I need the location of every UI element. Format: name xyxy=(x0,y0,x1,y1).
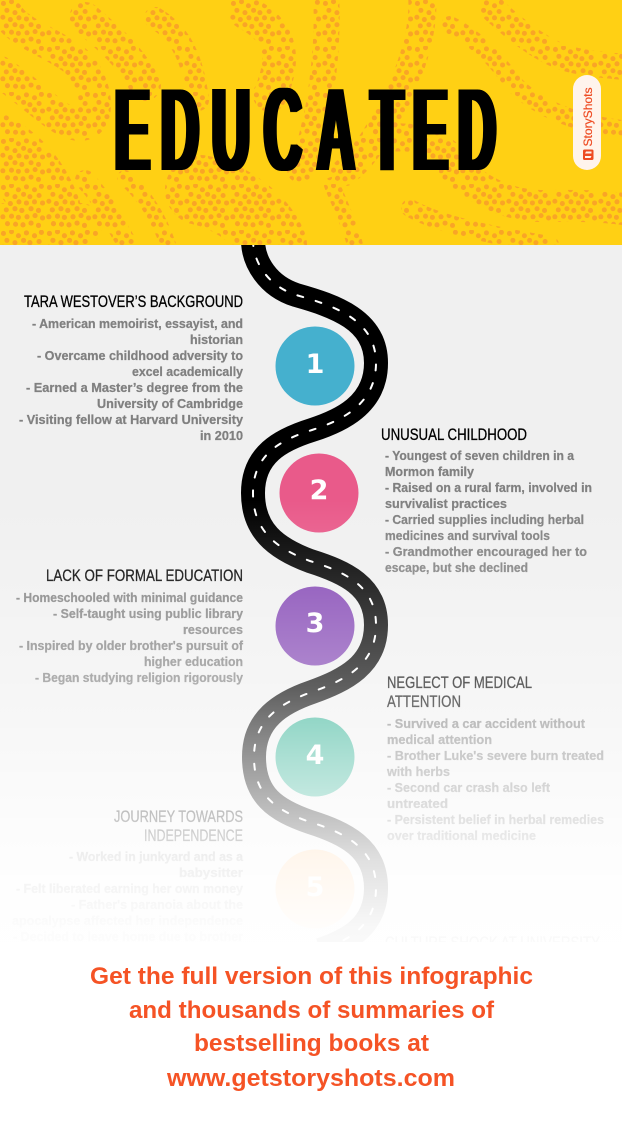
body 5 xyxy=(16,852,243,894)
heading 1: TARA WESTOVER’S BACKGROUND xyxy=(24,292,243,311)
body 5: - Father's paranoia about the xyxy=(71,898,243,912)
body 4: medical attention xyxy=(387,733,492,747)
circle 5: 5 xyxy=(306,872,324,903)
body 1 xyxy=(19,317,243,443)
body 1: - American memoirist, essayist, and xyxy=(32,317,243,331)
body 4: with herbs xyxy=(386,765,450,779)
body 2: - Raised on a rural farm, involved in xyxy=(385,481,592,495)
header banner with dotted pattern xyxy=(0,0,622,250)
circle 1 xyxy=(276,326,354,406)
body 1: University of Cambridge xyxy=(97,397,243,411)
body 2: medicines and survival tools xyxy=(385,529,550,543)
logo icon xyxy=(583,150,594,160)
heading 4: NEGLECT OF MEDICAL xyxy=(387,673,532,692)
body 1: - Overcame childhood adversity to xyxy=(37,349,243,363)
body 4: - Persistent belief in herbal remedies xyxy=(387,813,604,827)
heading 5: JOURNEY TOWARDS xyxy=(114,807,243,826)
body 1: excel academically xyxy=(132,365,243,379)
call to action: bestselling books at xyxy=(194,1030,429,1057)
call to action: www.getstoryshots.com xyxy=(166,1065,455,1092)
panel 3: lack of formal education xyxy=(16,566,244,685)
body 1: in 2010 xyxy=(200,429,243,443)
call to action: and thousands of summaries of xyxy=(129,997,495,1024)
heading 5: INDEPENDENCE xyxy=(144,826,243,845)
body 3 xyxy=(16,591,244,685)
winding road xyxy=(253,240,376,950)
heading 5 xyxy=(114,810,242,842)
body 5: - Decided to leave home due to brother xyxy=(13,930,243,944)
circle 1: 1 xyxy=(306,349,324,380)
body 2 xyxy=(385,449,592,575)
body 3: - Began studying religion rigorously xyxy=(35,671,243,685)
circle 4: 4 xyxy=(306,740,324,771)
body 4: over traditional medicine xyxy=(387,829,536,843)
body 1: historian xyxy=(190,333,243,347)
body 5: apocalypse affected her independence xyxy=(12,914,243,928)
panel 1: background xyxy=(19,292,243,443)
call to action xyxy=(90,963,533,1092)
circle 3: 3 xyxy=(306,608,324,639)
body 4 xyxy=(386,717,604,843)
circle 3 xyxy=(276,586,354,666)
road and content area xyxy=(0,240,622,952)
body 2: escape, but she declined xyxy=(385,561,528,575)
panel 5: journey towards independence xyxy=(16,810,243,894)
body 2: survivalist practices xyxy=(385,497,507,511)
heading 2: UNUSUAL CHILDHOOD xyxy=(381,425,527,444)
body 5: babysitter xyxy=(179,866,243,880)
StoryShots logo badge xyxy=(573,75,601,170)
body 2: Mormon family xyxy=(385,465,474,479)
circle 5 xyxy=(276,850,354,900)
heading 4: ATTENTION xyxy=(387,692,461,711)
body 2: - Grandmother encouraged her to xyxy=(385,545,587,559)
heading 4 xyxy=(386,676,532,708)
circle 2: 2 xyxy=(310,475,328,506)
body 5: - Worked in junkyard and as a xyxy=(69,850,244,864)
logo wordmark: StoryShots xyxy=(581,88,595,146)
body 3: higher education xyxy=(144,655,243,669)
body 4: untreated xyxy=(387,797,448,811)
body 3: - Self-taught using public library xyxy=(53,607,243,621)
circle 4 xyxy=(276,718,354,796)
body 4: - Second car crash also left xyxy=(387,781,551,795)
body 3: resources xyxy=(183,623,243,637)
body 2: - Youngest of seven children in a xyxy=(385,449,575,463)
body 4: - Brother Luke's severe burn treated xyxy=(387,749,604,763)
body 3: - Inspired by older brother's pursuit of xyxy=(19,639,244,653)
panel 4: neglect of medical attention xyxy=(386,673,604,843)
title: EDUCATED xyxy=(115,61,496,197)
heading 3: LACK OF FORMAL EDUCATION xyxy=(46,566,243,585)
panel 2: unusual childhood xyxy=(381,425,592,575)
call to action: Get the full version of this infographic xyxy=(90,963,533,990)
body 1: - Earned a Master’s degree from the xyxy=(26,381,243,395)
body 2: - Carried supplies including herbal xyxy=(385,513,584,527)
circle 2 xyxy=(280,454,358,532)
body 5: - Felt liberated earning her own money xyxy=(16,882,243,896)
body 4: - Survived a car accident without xyxy=(387,717,586,731)
body 1: - Visiting fellow at Harvard University xyxy=(19,413,243,427)
body 3: - Homeschooled with minimal guidance xyxy=(16,591,243,605)
